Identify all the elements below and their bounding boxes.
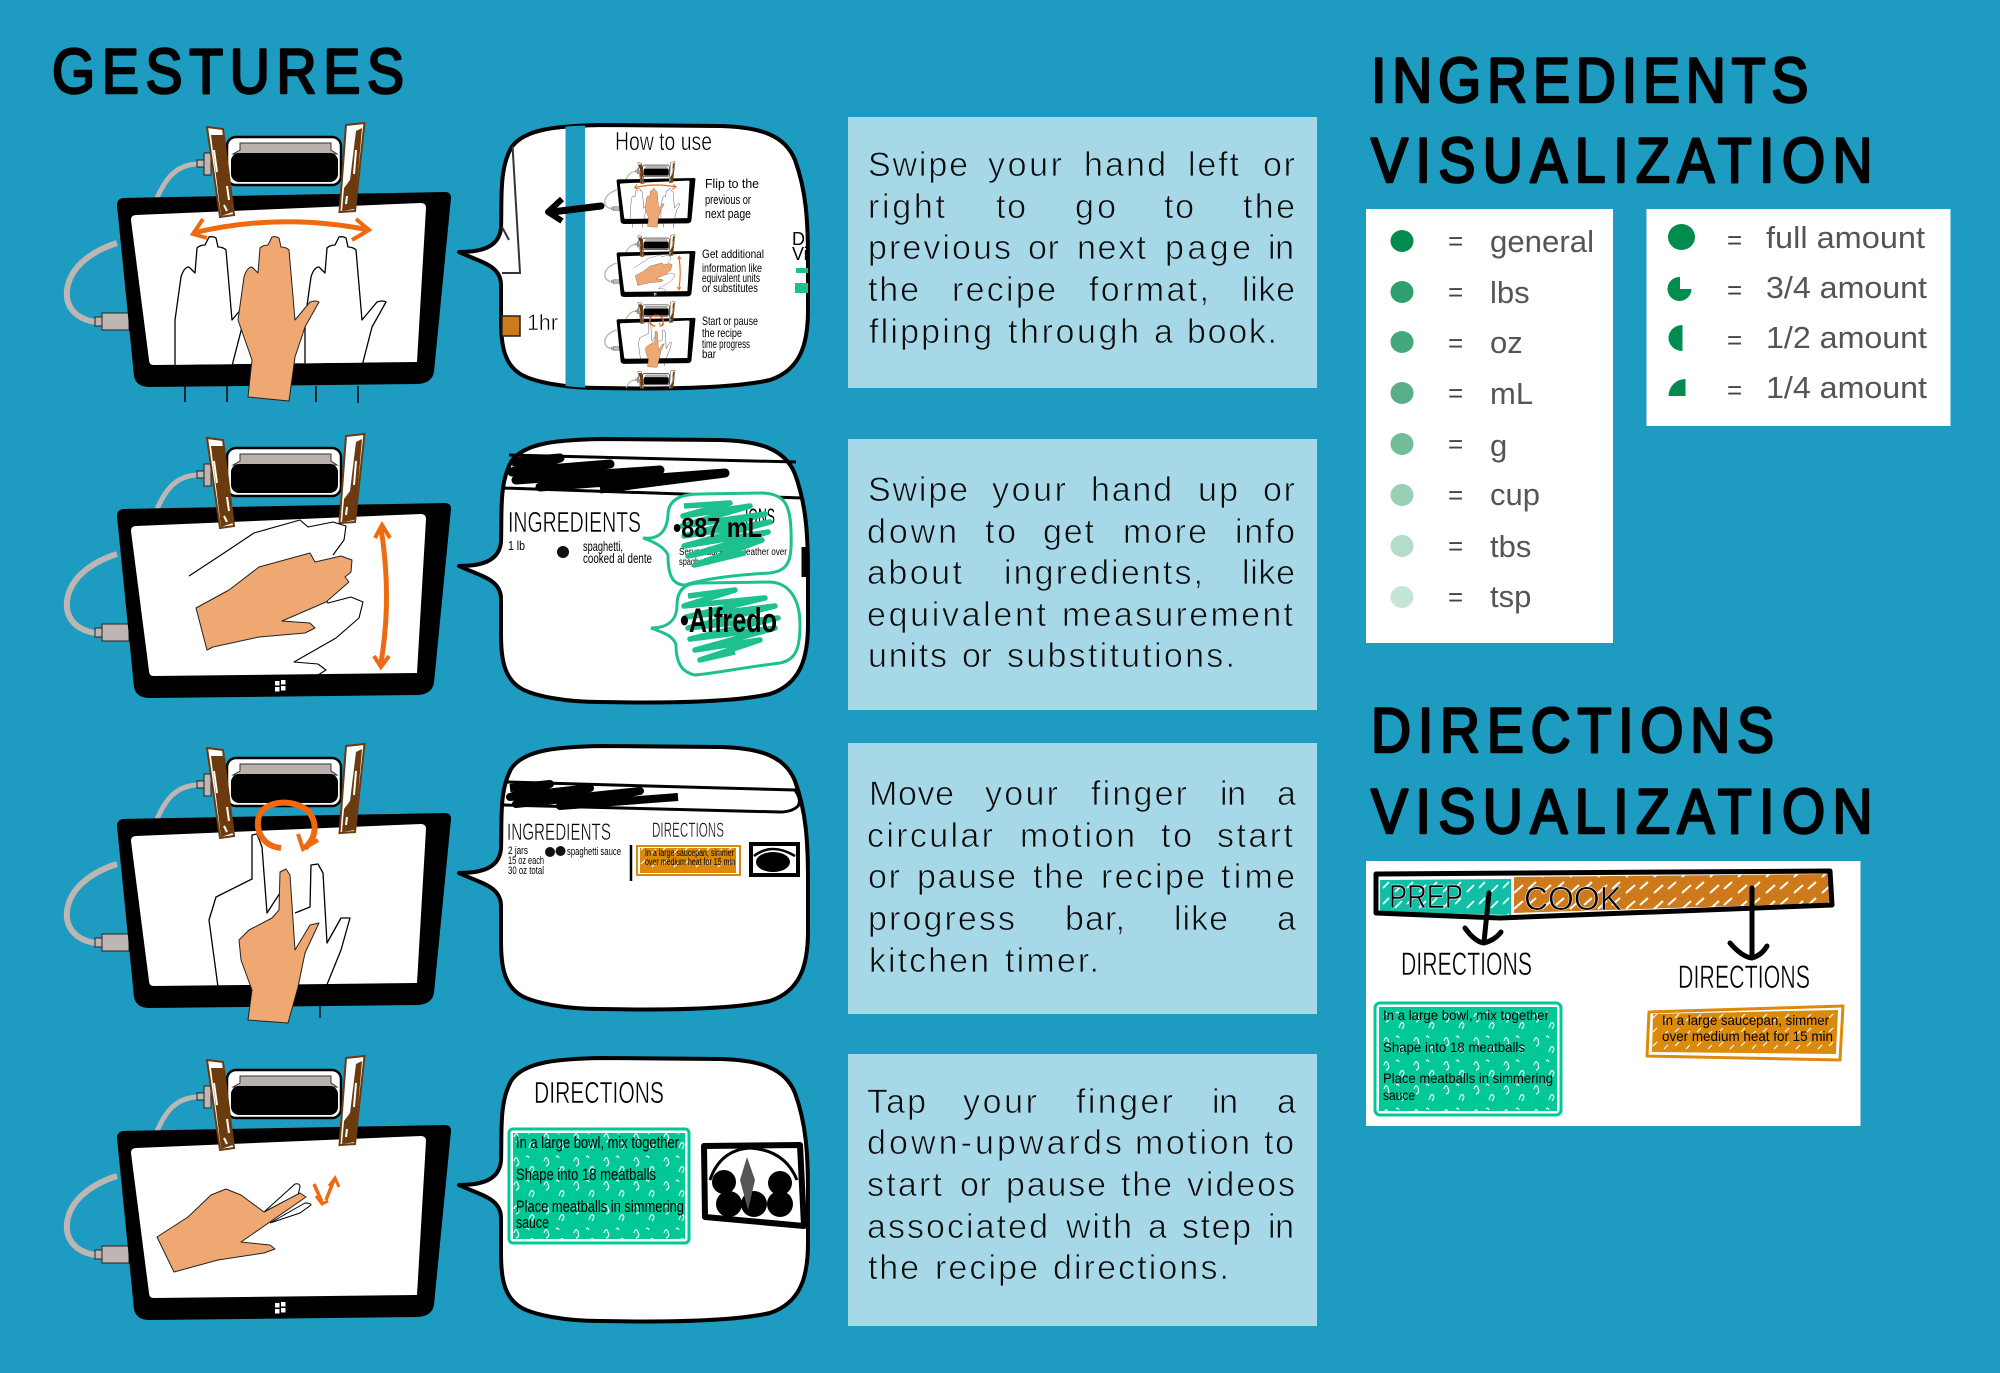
speech bubble: directions with video xyxy=(459,1058,808,1321)
orange cook step: over medium heat for 15 min xyxy=(1662,1028,1833,1044)
speech bubble: ingredients with equivalents: spaghetti, xyxy=(583,538,623,554)
text panel 4: with xyxy=(1065,1208,1132,1246)
unit: oz: = xyxy=(1448,328,1463,358)
speech bubble: how to use page: Start or pause xyxy=(702,314,758,328)
text panel 3: finger xyxy=(1091,775,1187,813)
unit: cup xyxy=(1390,477,1540,512)
green direction steps: Place meatballs in simmering xyxy=(516,1197,684,1216)
speech bubble: how to use page: Get additional xyxy=(702,247,764,261)
unit: general: general xyxy=(1490,224,1594,259)
speech bubble: how to use page: next page xyxy=(705,206,751,221)
orange cook step xyxy=(1647,1006,1843,1060)
text panel 1: or xyxy=(1263,146,1295,184)
text panel 1: through xyxy=(1008,313,1139,351)
unit: lbs xyxy=(1390,275,1530,310)
progress bar: prep and cook xyxy=(1376,871,1832,918)
legend: units by colour shade xyxy=(1366,209,1613,643)
amount: three quarters: 3/4 amount xyxy=(1766,270,1927,305)
unit: tsp: = xyxy=(1448,582,1463,612)
text panel 4: a xyxy=(1148,1208,1167,1246)
amount: full: = xyxy=(1727,225,1742,255)
text panel 3: start xyxy=(1217,817,1294,855)
text panel 1: page xyxy=(1165,229,1251,267)
green prep steps xyxy=(1375,1003,1561,1115)
text panel 3: or xyxy=(868,858,900,896)
green direction steps xyxy=(509,1129,689,1243)
text panel 1: Swipe xyxy=(868,146,968,184)
green prep steps: Place meatballs in simmering xyxy=(1383,1070,1553,1086)
callout: Alfredo substitution: •Alfredo xyxy=(680,602,777,640)
amount: three quarters: = xyxy=(1727,275,1742,305)
text panel 4: down-upwards xyxy=(867,1124,1122,1162)
text panel 4: your xyxy=(963,1083,1037,1121)
heading: ingredients visualization: INGREDIENTS xyxy=(1371,45,1808,116)
text panel 2: like xyxy=(1242,554,1295,592)
video thumbnail xyxy=(704,1145,804,1226)
text panel 2: ingredients, xyxy=(1004,554,1203,592)
gesture row 4: tap finger xyxy=(67,1054,1317,1326)
text panel 1: the xyxy=(1243,188,1295,226)
unit: g: g xyxy=(1490,428,1507,463)
amount: three quarters xyxy=(1668,270,1927,305)
unit: tsp xyxy=(1390,579,1531,614)
unit: oz: oz xyxy=(1490,325,1523,360)
heading: directions visualization xyxy=(1371,695,1873,847)
video thumbnail xyxy=(751,844,798,875)
text panel 3: Move xyxy=(869,775,954,813)
text panel 1: a xyxy=(1154,313,1173,351)
text panel 2: down xyxy=(867,513,957,551)
text panel 1: left xyxy=(1188,146,1240,184)
unit: g xyxy=(1390,428,1507,463)
unit: general: = xyxy=(1448,226,1463,256)
text panel 2: get xyxy=(1043,513,1095,551)
callout: 887 mL equivalent: IONS xyxy=(745,504,775,529)
text panel 4: associated xyxy=(867,1208,1048,1246)
gesture row 3: circular finger motion xyxy=(67,743,1317,1023)
text panel 4: start xyxy=(867,1166,943,1204)
green direction steps: In a large bowl, mix together xyxy=(516,1133,679,1152)
text panel 3: a xyxy=(1277,900,1296,938)
text panel 1: in xyxy=(1268,229,1294,267)
speech bubble: how to use page: Flip to the xyxy=(705,176,759,191)
heading: directions visualization: VISUALIZATION xyxy=(1371,776,1873,847)
green prep steps: sauce xyxy=(1383,1087,1415,1103)
amount: quarter: 1/4 amount xyxy=(1766,370,1927,405)
text panel 3: your xyxy=(985,775,1058,813)
text panel 3: motion xyxy=(1020,817,1135,855)
text panel 2: units xyxy=(868,637,947,675)
unit: lbs: = xyxy=(1448,277,1463,307)
title: gestures: GESTURES xyxy=(52,36,404,107)
text panel 3: like xyxy=(1174,900,1228,938)
text panel 1: like xyxy=(1242,271,1295,309)
speech bubble: how to use page: information like xyxy=(702,261,762,275)
heading: ingredients visualization xyxy=(1371,45,1873,196)
text panel 1: the xyxy=(868,271,919,309)
gesture row 1: swipe left or right xyxy=(67,117,1317,433)
gesture row 2: swipe up or down xyxy=(67,434,1317,710)
tablet with tap gesture xyxy=(67,1056,451,1320)
text panel 1: go xyxy=(1075,188,1116,226)
progress bar: prep and cook: COOK xyxy=(1524,880,1622,917)
text panel 4: recipe xyxy=(935,1249,1038,1287)
speech bubble: recipe with progress: INGREDIENTS xyxy=(507,819,611,846)
text panel 2: more xyxy=(1123,513,1207,551)
text panel 3: to xyxy=(1161,817,1192,855)
speech bubble: how to use page: equivalent units xyxy=(702,271,760,285)
speech bubble: how to use page: 1hr xyxy=(527,310,558,335)
text panel 3: the xyxy=(1033,858,1084,896)
text panel 1: to xyxy=(996,188,1026,226)
speech bubble: how to use page: bar xyxy=(702,347,716,361)
text panel 2: measurement xyxy=(1062,596,1294,634)
speech bubble: ingredients with equivalents: INGREDIENTS xyxy=(508,507,641,539)
text panel 1: your xyxy=(988,146,1062,184)
text panel 1: book. xyxy=(1187,313,1277,351)
text panel 3: bar, xyxy=(1065,900,1125,938)
text panel 2: your xyxy=(992,471,1066,509)
amount: quarter: = xyxy=(1727,375,1742,405)
text panel 4: to xyxy=(1264,1124,1294,1162)
unit: general xyxy=(1390,224,1594,259)
progress bar: prep and cook: PREP xyxy=(1389,878,1463,915)
arrow: cook to directions xyxy=(1730,888,1767,958)
unit: tsp: tsp xyxy=(1490,579,1531,614)
text panel 3: a xyxy=(1277,775,1296,813)
text panel 1: hand xyxy=(1084,146,1166,184)
tablet with vertical swipe hand xyxy=(67,434,451,698)
label: cook directions: DIRECTIONS xyxy=(1678,959,1810,995)
speech bubble: how to use page: How to use xyxy=(615,126,712,156)
speech bubble: recipe with progress xyxy=(459,746,808,1009)
text panel 1: or xyxy=(1028,229,1059,267)
text panel 2: Swipe xyxy=(868,471,968,509)
unit: mL xyxy=(1390,376,1533,411)
orange direction step: In a large saucepan, simmer xyxy=(645,848,734,859)
tablet with circular finger gesture xyxy=(67,744,451,1023)
text panel 4: a xyxy=(1277,1083,1296,1121)
text panel 4: the xyxy=(868,1249,919,1287)
speech bubble: ingredients with equivalents xyxy=(459,439,808,702)
text panel 3: timer. xyxy=(1005,942,1099,980)
callout: 887 mL equivalent: •887 mL xyxy=(673,512,762,543)
callout: Alfredo substitution xyxy=(651,582,800,675)
amount: quarter xyxy=(1668,370,1927,405)
text panel 3: progress xyxy=(868,900,1015,938)
text panel 2: or xyxy=(962,637,992,675)
text panel 1: recipe xyxy=(952,271,1056,309)
speech bubble: how to use page: previous or xyxy=(705,192,751,207)
text panel 1 xyxy=(848,117,1317,388)
text panel 1: format, xyxy=(1089,271,1209,309)
text panel 4: or xyxy=(960,1166,991,1204)
callout: 887 mL equivalent: spaghetti xyxy=(679,557,709,568)
orange direction step xyxy=(637,846,740,875)
text panel 4: directions. xyxy=(1053,1249,1229,1287)
text panel 2: equivalent xyxy=(867,596,1047,634)
text panel 4: in xyxy=(1268,1208,1294,1246)
heading: directions visualization: DIRECTIONS xyxy=(1371,695,1774,766)
text panel 3: kitchen xyxy=(869,942,989,980)
arrow: prep to directions xyxy=(1465,893,1501,943)
speech bubble: recipe with progress: DIRECTIONS xyxy=(652,819,724,842)
text panel 1: next xyxy=(1077,229,1147,267)
speech bubble: recipe with progress: spaghetti sauce xyxy=(567,846,621,858)
text panel 4: step xyxy=(1182,1208,1251,1246)
speech bubble: how to use page: the recipe xyxy=(702,326,742,340)
text panel 3: recipe xyxy=(1101,858,1205,896)
tablet with horizontal swipe hand xyxy=(67,123,451,403)
text panel 1: right xyxy=(868,188,946,226)
unit: mL: = xyxy=(1448,378,1463,408)
text panel 2: hand xyxy=(1091,471,1172,509)
speech bubble: ingredients with equivalents: 1 lb xyxy=(508,538,525,553)
text panel 2: about xyxy=(867,554,963,592)
unit: cup: cup xyxy=(1490,477,1540,512)
speech bubble: recipe with progress: 2 jars xyxy=(508,845,528,857)
speech bubble: recipe with progress: 30 oz total xyxy=(508,865,544,877)
text panel 4: Tap xyxy=(867,1083,926,1121)
speech bubble: how to use page: Di xyxy=(792,229,809,249)
label: prep directions: DIRECTIONS xyxy=(1401,946,1532,982)
panel: directions visualization sketch xyxy=(1366,861,1860,1126)
text panel 4: in xyxy=(1212,1083,1238,1121)
green direction steps: sauce xyxy=(516,1213,549,1232)
text panel 4 xyxy=(848,1054,1317,1326)
callout: 887 mL equivalent: Serve sauce on a leather over xyxy=(679,547,788,558)
callout: 887 mL equivalent xyxy=(643,493,791,585)
speech bubble: how to use page: or substitutes xyxy=(702,281,758,295)
text panel 4: finger xyxy=(1076,1083,1173,1121)
text panel 3: pause xyxy=(917,858,1016,896)
text panel 1: to xyxy=(1164,188,1194,226)
text panel 2 xyxy=(848,439,1317,710)
speech bubble: how to use page xyxy=(456,123,810,390)
green prep steps: In a large bowl, mix together xyxy=(1383,1007,1549,1023)
text panel 2: info xyxy=(1235,513,1295,551)
legend: amount by pie shape xyxy=(1646,209,1950,426)
text panel 3: time xyxy=(1221,858,1295,896)
amount: half xyxy=(1668,320,1927,355)
text panel 4: pause xyxy=(1006,1166,1106,1204)
amount: full: full amount xyxy=(1766,220,1925,255)
unit: tbs: = xyxy=(1448,531,1463,561)
speech bubble: how to use page: Vi xyxy=(792,244,808,264)
amount: half: 1/2 amount xyxy=(1766,320,1927,355)
speech bubble: directions with video: DIRECTIONS xyxy=(534,1075,664,1110)
unit: mL: mL xyxy=(1490,376,1533,411)
text panel 2: to xyxy=(985,513,1016,551)
text panel 4: motion xyxy=(1135,1124,1250,1162)
orange direction step: over medium heat for 15 min xyxy=(645,857,735,868)
text panel 3 xyxy=(848,743,1317,1014)
unit: tbs: tbs xyxy=(1490,529,1531,564)
unit: oz xyxy=(1390,325,1523,360)
text panel 2: or xyxy=(1263,471,1295,509)
green prep steps: Shape into 18 meatballs xyxy=(1383,1039,1525,1055)
text panel 4: videos xyxy=(1187,1166,1295,1204)
amount: full xyxy=(1668,220,1925,255)
unit: cup: = xyxy=(1448,480,1463,510)
speech bubble: how to use page: time progress xyxy=(702,337,750,351)
unit: tbs xyxy=(1390,529,1531,564)
green direction steps: Shape into 18 meatballs xyxy=(516,1165,656,1184)
unit: lbs: lbs xyxy=(1490,275,1530,310)
speech bubble: recipe with progress: 15 oz each xyxy=(508,855,544,867)
speech bubble: ingredients with equivalents: cooked al dente xyxy=(583,550,652,566)
text panel 3: in xyxy=(1220,775,1246,813)
heading: ingredients visualization: VISUALIZATION xyxy=(1371,125,1873,196)
text panel 2: substitutions. xyxy=(1007,637,1235,675)
text panel 2: up xyxy=(1198,471,1238,509)
orange cook step: In a large saucepan, simmer xyxy=(1662,1012,1829,1028)
unit: g: = xyxy=(1448,429,1463,459)
text panel 1: previous xyxy=(868,229,1011,267)
text panel 4: the xyxy=(1121,1166,1172,1204)
amount: half: = xyxy=(1727,325,1742,355)
text panel 3: circular xyxy=(867,817,993,855)
text panel 1: flipping xyxy=(869,313,992,351)
